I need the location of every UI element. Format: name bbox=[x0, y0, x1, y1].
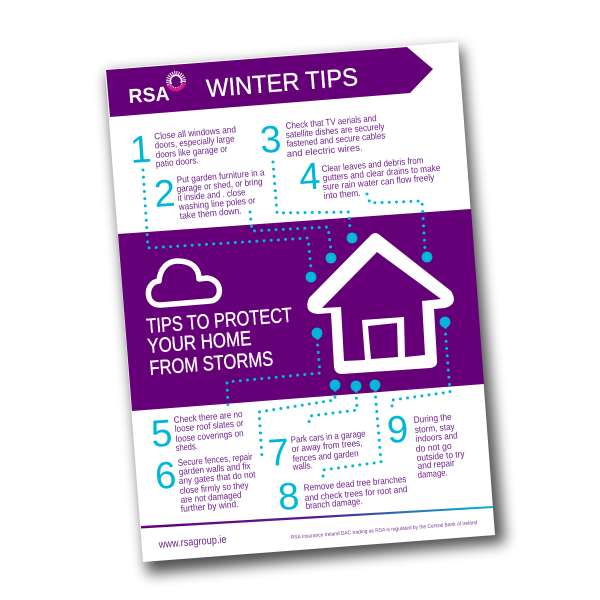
tip 6 text: close firmly so they bbox=[179, 480, 249, 496]
icon: house bbox=[307, 233, 454, 374]
tip 5 text: loose coverings on bbox=[175, 428, 244, 444]
tip 5 text bbox=[173, 409, 244, 453]
number 9: 9 bbox=[386, 409, 410, 452]
dotted connector 8 bbox=[323, 390, 381, 478]
tip 9 text: indoors and bbox=[415, 430, 458, 444]
number 8: 8 bbox=[277, 476, 301, 519]
number 1: 1 bbox=[129, 129, 153, 172]
tip 2 text: garage or shed, or bring bbox=[176, 177, 263, 194]
house door bbox=[368, 323, 398, 359]
tip 8 bbox=[277, 474, 408, 519]
tip 4 bbox=[298, 155, 441, 201]
dotted connector 9 bbox=[392, 327, 450, 407]
house outline bbox=[307, 233, 454, 374]
tip 3 text: satellite dishes are securely bbox=[285, 121, 385, 140]
tip 3 bbox=[259, 113, 386, 162]
dotted connector 7 bbox=[308, 391, 357, 428]
logo wordmark: RSA bbox=[128, 83, 170, 108]
tip 3 text bbox=[285, 113, 386, 159]
tip 7 text: Park cars in a garage bbox=[290, 428, 366, 445]
tip 6 bbox=[154, 451, 256, 514]
tip 7 text: walls. bbox=[291, 460, 313, 472]
tip 7 text: or away from trees, bbox=[291, 438, 363, 454]
RSA logo bbox=[128, 73, 184, 108]
footer legal note: RSA Insurance Ireland DAC trading as RSA is regulated by the Central Bank of Ireland bbox=[291, 520, 478, 541]
dotted connector 5 bbox=[227, 338, 320, 408]
tip 2 bbox=[153, 167, 266, 221]
tip 2 text: Put garden furniture in a bbox=[176, 167, 266, 185]
tip 8 text: branch damage. bbox=[305, 496, 363, 511]
tip 7 bbox=[267, 428, 366, 475]
footer url: www.rsagroup.ie bbox=[157, 534, 227, 551]
tip 3 text: Check that TV aerials and bbox=[285, 113, 377, 131]
icon: cloud bbox=[148, 261, 219, 305]
number 7: 7 bbox=[267, 432, 291, 475]
tip 5 text: loose roof slates or bbox=[174, 418, 244, 434]
tip 3 text: and electric wires. bbox=[286, 142, 363, 159]
tip 2 text bbox=[176, 167, 266, 221]
tip 9 text: storm, stay bbox=[414, 422, 455, 435]
tip 9 text: and repair bbox=[417, 458, 455, 471]
heading line 2: YOUR HOME bbox=[147, 327, 252, 358]
tip 1 text: doors, especially large bbox=[154, 134, 235, 150]
banner arrow bbox=[106, 47, 433, 117]
tip 6 text: Secure fences, repair bbox=[177, 451, 253, 468]
tip 5 bbox=[150, 409, 244, 456]
title: WINTER TIPS bbox=[205, 63, 359, 103]
tip 4 text: into them. bbox=[323, 188, 361, 201]
paper bbox=[105, 42, 495, 562]
tip 2 text: washing line poles or bbox=[177, 195, 256, 212]
dotted connector 2 bbox=[250, 212, 331, 250]
tip 4 text: sure rain water can flow freely bbox=[322, 172, 435, 192]
tip 8 text: Remove dead tree branches bbox=[303, 474, 407, 493]
tip 9 bbox=[386, 409, 465, 480]
tip 6 text: further by wind. bbox=[180, 499, 239, 514]
tip 2 text: take them down. bbox=[179, 206, 242, 221]
tip 4 text: gutters and clear drains to make bbox=[322, 163, 441, 183]
purple band bbox=[118, 209, 484, 411]
tip 6 text: are not damaged bbox=[180, 490, 242, 505]
tip 7 text bbox=[290, 428, 366, 472]
tip 1 text: Close all windows and bbox=[154, 124, 236, 141]
number 5: 5 bbox=[150, 413, 174, 456]
tip 8 text: and check trees for root and bbox=[304, 484, 408, 503]
tip 2 text: it inside and . close bbox=[177, 187, 246, 203]
number 6: 6 bbox=[154, 455, 178, 498]
dotted connector 6 bbox=[259, 390, 335, 457]
band heading bbox=[146, 304, 293, 380]
number 2: 2 bbox=[153, 173, 177, 216]
number 4: 4 bbox=[298, 156, 322, 199]
number 3: 3 bbox=[259, 119, 283, 162]
logo swirl bbox=[168, 73, 184, 90]
tip 9 text: do not go bbox=[415, 441, 452, 454]
tip 1 bbox=[129, 124, 236, 172]
dotted connector 4 bbox=[367, 194, 425, 250]
tip 3 text: fastened and secure cables bbox=[286, 130, 386, 149]
tip 6 text: garden walls and fix bbox=[178, 461, 251, 477]
tip 9 text: damage. bbox=[417, 467, 448, 480]
tip 5 text: Check there are no bbox=[173, 409, 243, 425]
heading line 1: TIPS TO PROTECT bbox=[146, 304, 293, 338]
tip 6 text: any gates that do not bbox=[178, 469, 256, 486]
dotted connector 3 bbox=[273, 162, 350, 230]
tip 4 text: Clear leaves and debris from bbox=[321, 155, 424, 174]
tip 5 text: sheds. bbox=[175, 441, 198, 453]
tip 1 text: doors like garage or bbox=[155, 144, 228, 160]
poster sheet bbox=[105, 42, 495, 562]
tip 8 text bbox=[303, 474, 408, 511]
house interior bbox=[322, 252, 441, 361]
heading line 3: FROM STORMS bbox=[149, 347, 274, 380]
paper shadow bbox=[107, 48, 505, 574]
header banner bbox=[106, 47, 433, 117]
tip 9 text: During the bbox=[413, 412, 452, 425]
footer rule bbox=[141, 506, 493, 528]
tip 1 text bbox=[154, 124, 236, 169]
dotted connector 1 bbox=[143, 170, 311, 268]
tip 4 text bbox=[321, 155, 441, 201]
tip 6 text bbox=[177, 451, 256, 514]
connector pins bbox=[306, 233, 450, 393]
tip 7 text: fences and garden bbox=[292, 448, 359, 464]
tip 9 text bbox=[413, 412, 465, 480]
tip 1 text: patio doors. bbox=[155, 155, 199, 169]
tip 9 text: outside to try bbox=[416, 449, 465, 463]
